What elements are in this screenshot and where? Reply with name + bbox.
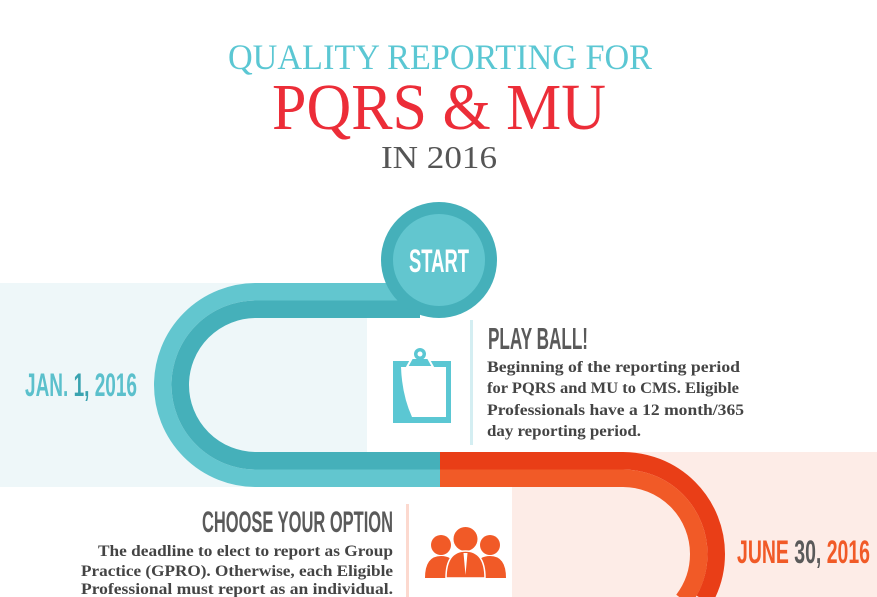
play ball body: Professionals have a 12 month/365 — [487, 402, 744, 419]
start circle: START — [409, 243, 469, 279]
icon: clipboard — [393, 348, 451, 423]
divider pink — [406, 504, 409, 597]
choose your option body: The deadline to elect to report as Group — [98, 543, 393, 560]
play ball body: for PQRS and MU to CMS. Eligible — [487, 380, 739, 397]
play ball heading: PLAY BALL! — [488, 321, 588, 356]
play ball body — [487, 359, 744, 440]
play ball body: Beginning of the reporting period — [487, 359, 740, 376]
title: PQRS & MU — [272, 71, 606, 144]
choose your option body: Practice (GPRO). Otherwise, each Eligible — [81, 563, 393, 580]
divider — [470, 320, 473, 445]
choose your option body — [81, 543, 393, 597]
choose your option heading: CHOOSE YOUR OPTION — [202, 506, 393, 539]
title: IN 2016 — [381, 139, 497, 175]
start circle — [381, 202, 497, 318]
white panel behind play ball — [367, 320, 877, 447]
track: orange — [440, 461, 716, 597]
date: jan 1 2016: JAN. 1, 2016 — [25, 367, 137, 403]
title — [228, 37, 652, 175]
icon: people — [425, 527, 506, 578]
title: QUALITY REPORTING FOR — [228, 37, 652, 77]
track: teal — [163, 292, 441, 478]
play ball body: day reporting period. — [487, 423, 641, 440]
background: light blue band — [0, 283, 367, 487]
background: pink band — [512, 452, 877, 597]
